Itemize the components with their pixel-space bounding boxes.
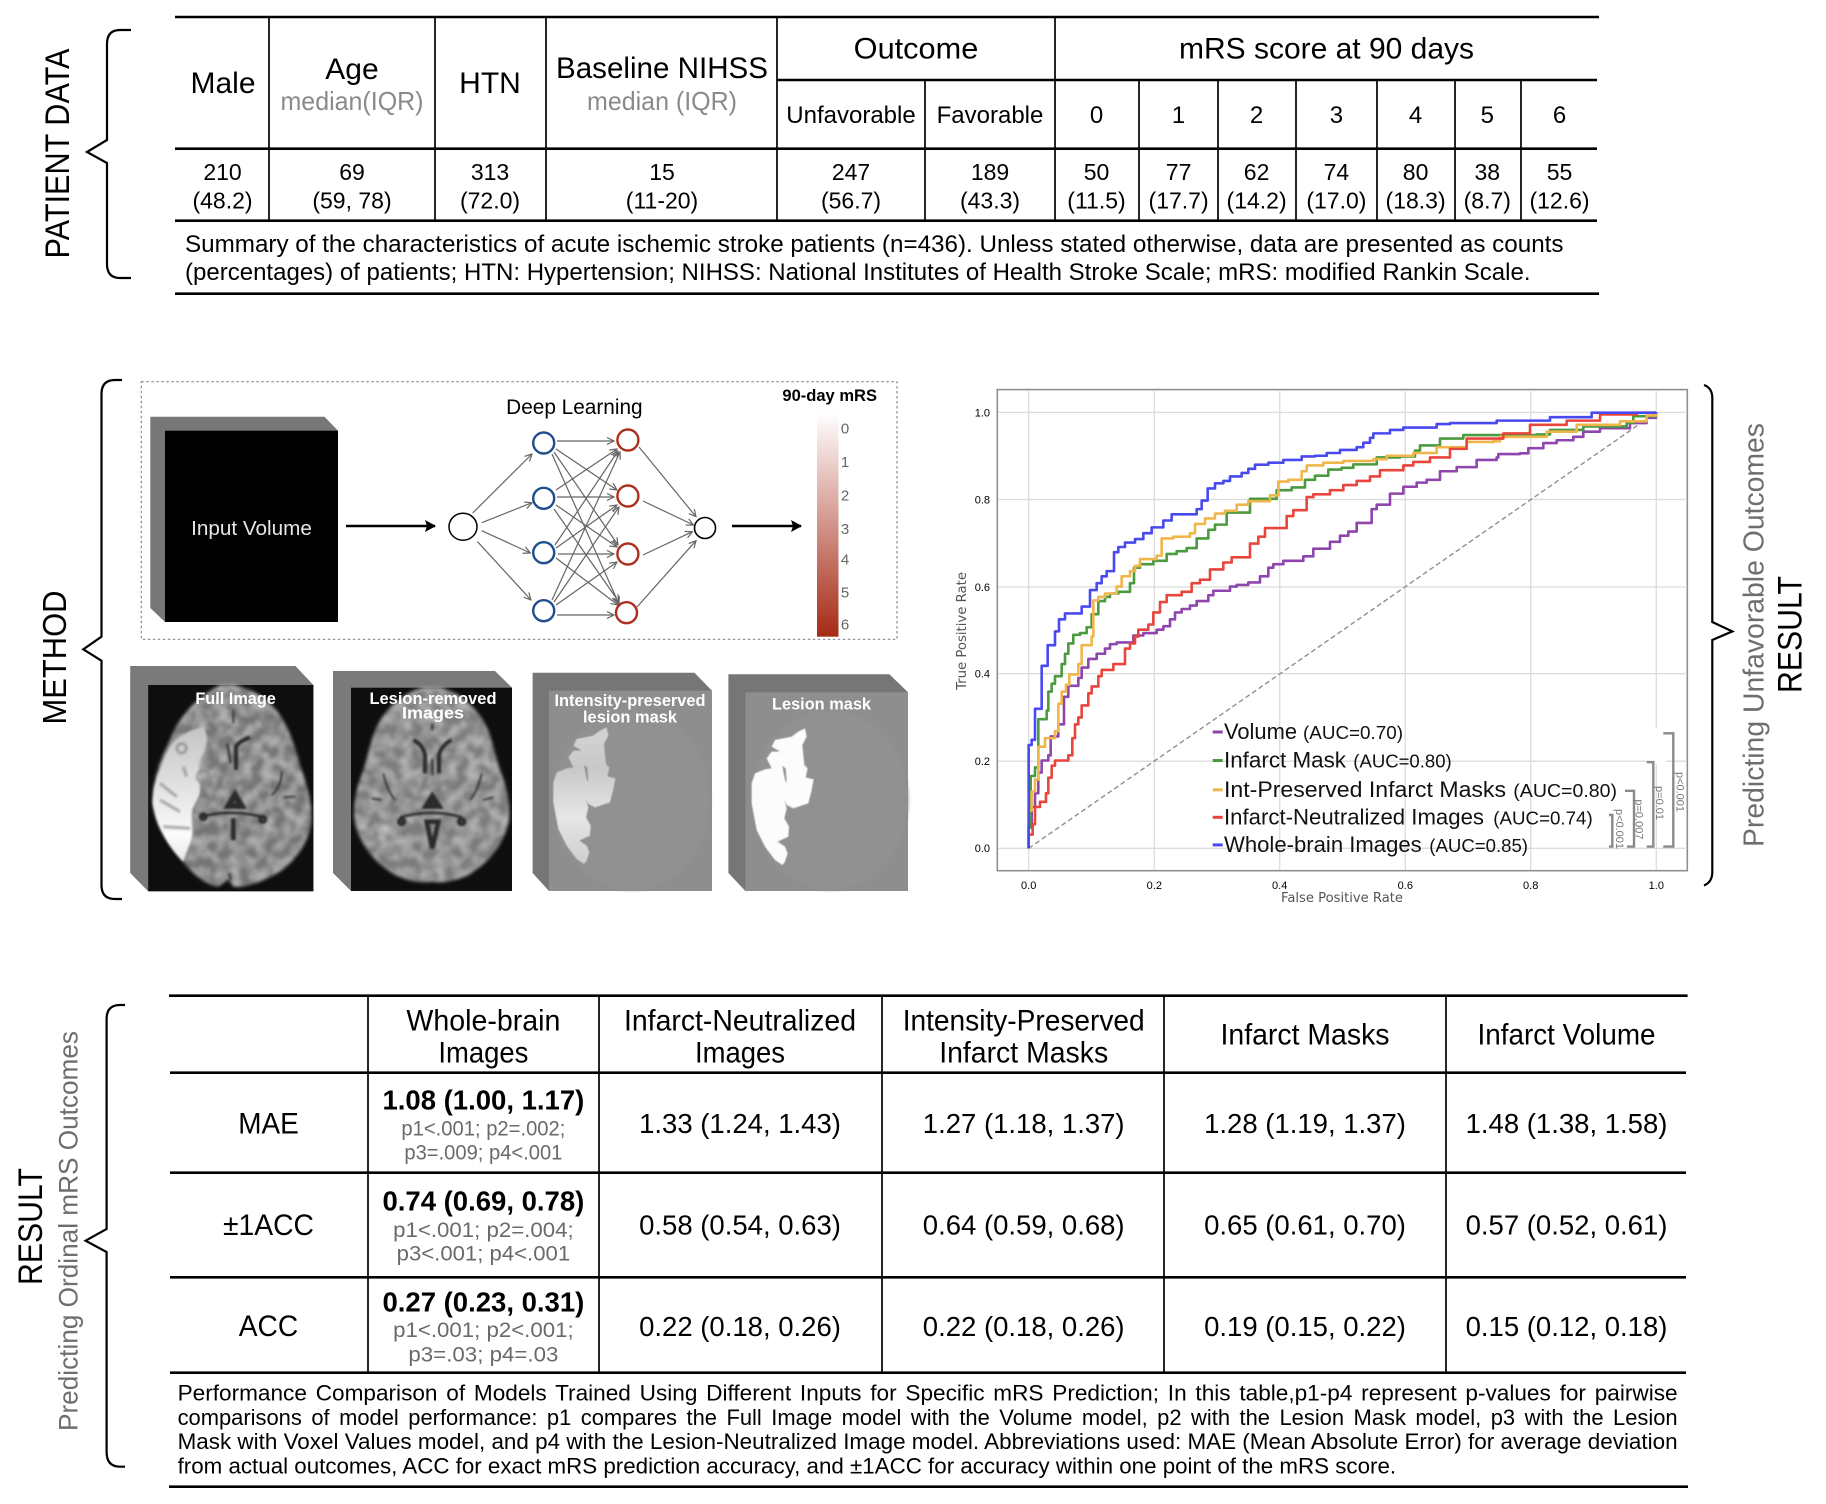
brace: patient data [87, 30, 131, 278]
panel: intensity-preserved lesion mask input: Intensity-preserved [554, 692, 706, 710]
table: patient characteristics: 6 [1553, 102, 1566, 129]
table: model performance: 0.22 (0.18, 0.26) [639, 1311, 841, 1342]
legend: 90-day mRS colour scale: 3 [841, 521, 849, 538]
panel: lesion-removed input [333, 671, 512, 891]
axis tick labels: 0.2 [975, 756, 990, 768]
table: patient characteristics: 4 [1409, 102, 1422, 129]
table: patient characteristics: (8.7) [1464, 188, 1511, 214]
legend: ROC models: (AUC=0.80) [1513, 780, 1617, 801]
legend: ROC models: Int-Preserved Infarct Masks [1224, 777, 1506, 802]
table: patient characteristics: median (IQR) [587, 86, 737, 116]
legend: 90-day mRS colour scale: 90-day mRS [782, 387, 877, 405]
table: model performance: 1.27 (1.18, 1.37) [923, 1108, 1125, 1139]
table: model performance: Images [438, 1036, 528, 1070]
table: patient characteristics: Unfavorable [786, 102, 916, 129]
footnote: performance table: Performance Comparison of Models Trained Using Different Inputs for Specific mRS Prediction; In this table,p1-p4 represent p-values for pairwise [178, 1380, 1678, 1406]
table: model performance: p3<.001; p4<.001 [397, 1242, 570, 1266]
table: model performance: 0.22 (0.18, 0.26) [923, 1311, 1125, 1342]
table: patient characteristics: (11-20) [626, 188, 698, 214]
trace: int-preserved infarct masks [1029, 412, 1656, 848]
axis tick labels: 1.0 [975, 407, 990, 419]
footnote: performance table [178, 1380, 1678, 1478]
significance brackets: p=0.01 [1653, 786, 1665, 820]
ROC traces [1029, 412, 1656, 848]
footnote: patient table [185, 231, 1564, 286]
panel: intensity-preserved lesion mask input: lesion mask [583, 708, 678, 726]
table: model performance: 0.58 (0.54, 0.63) [639, 1210, 841, 1240]
table: model performance: 1.28 (1.19, 1.37) [1204, 1108, 1406, 1139]
trace: infarct-neutralized images [1029, 412, 1656, 848]
table: model performance: p1<.001; p2=.002; [401, 1118, 565, 1140]
table: patient characteristics: 80 [1403, 159, 1428, 185]
table: patient characteristics: (43.3) [960, 188, 1020, 214]
table: patient characteristics: 313 [471, 159, 509, 185]
legend: ROC models [1213, 719, 1617, 857]
axis tick labels: 0.0 [975, 843, 990, 855]
table: model performance: 1.33 (1.24, 1.43) [639, 1108, 841, 1139]
image: binary lesion mask [752, 710, 908, 890]
table: patient characteristics: 247 [832, 159, 870, 185]
legend: ROC models: Whole-brain Images [1224, 832, 1422, 857]
table: model performance: p1<.001; p2<.001; [393, 1319, 574, 1342]
legend: ROC models: (AUC=0.74) [1493, 808, 1593, 828]
panel: lesion-removed input: Lesion-removed [370, 690, 496, 708]
arrow: input to network [346, 525, 435, 527]
subheading: predicting ordinal mRS outcomes: Predicting Ordinal mRS Outcomes [54, 1031, 84, 1431]
trace: infarct mask [1029, 412, 1656, 848]
arrow: network to score [732, 525, 801, 527]
table: patient characteristics: 189 [971, 159, 1009, 185]
panel: lesion mask input [728, 674, 908, 891]
heading: deep learning: Deep Learning [506, 396, 643, 419]
plot frame [997, 390, 1687, 871]
table: model performance: p3=.03; p4=.03 [408, 1344, 558, 1366]
significance brackets: p=0.007 [1632, 799, 1644, 839]
legend: ROC models: Volume [1224, 719, 1297, 744]
legend: ROC models: Infarct-Neutralized Images [1224, 804, 1484, 830]
table: model performance: p1<.001; p2=.004; [393, 1219, 574, 1242]
image: brain scan without lesion [354, 687, 509, 882]
brace: unfavorable outcomes [1704, 385, 1732, 886]
panel: full image input: Full Image [195, 690, 276, 708]
axis tick labels: 0.8 [1523, 880, 1538, 892]
axis tick labels: 0.2 [1147, 880, 1162, 892]
axis title: true positive rate: True Positive Rate [955, 572, 970, 691]
legend: ROC models: Infarct Mask [1224, 748, 1347, 772]
legend: ROC models: (AUC=0.80) [1353, 750, 1452, 772]
table: patient characteristics: 1 [1172, 102, 1185, 129]
diagram: neural network [449, 430, 716, 623]
table: model performance: p3=.009; p4<.001 [404, 1142, 562, 1164]
panel: intensity-preserved lesion mask input [533, 673, 712, 891]
trace: whole-brain images [1029, 412, 1656, 848]
section label: method [36, 380, 122, 899]
chance diagonal [1029, 412, 1656, 848]
table: patient characteristics: 69 [339, 159, 365, 185]
table: patient characteristics: Favorable [937, 102, 1043, 129]
heading: result: RESULT [12, 1168, 50, 1285]
legend: 90-day mRS colour scale: 5 [841, 584, 849, 602]
table: patient characteristics: (59, 78) [312, 188, 392, 214]
subheading: predicting unfavorable outcomes: Predicting Unfavorable Outcomes [1738, 423, 1770, 847]
table: patient characteristics: (14.2) [1227, 188, 1287, 214]
heading: patient data: PATIENT DATA [39, 48, 77, 258]
icon: input volume block [150, 417, 338, 622]
table: patient characteristics: Baseline NIHSS [556, 52, 768, 85]
axis tick labels: 0.6 [975, 582, 990, 594]
table: patient characteristics: 3 [1330, 102, 1343, 129]
axis tick labels: 0.8 [975, 494, 990, 506]
table: patient characteristics: 38 [1475, 159, 1500, 185]
table: model performance: 1.08 (1.00, 1.17) [382, 1084, 584, 1116]
table: patient characteristics: Outcome [854, 32, 978, 66]
table: patient characteristics: (72.0) [460, 188, 520, 214]
table: model performance: 0.57 (0.52, 0.61) [1466, 1210, 1667, 1240]
table: patient characteristics: (48.2) [192, 188, 253, 214]
legend: 90-day mRS colour scale: 1 [841, 454, 849, 471]
table: model performance: ±1ACC [223, 1209, 314, 1242]
table: patient characteristics: 2 [1250, 102, 1263, 129]
footnote: performance table: Mask with Voxel Values model, and p4 with the Lesion-Neutralized Image model. Abbreviations used: MAE (Mean Absolute Error) for average deviation [178, 1429, 1678, 1454]
significance brackets: p<0.001 [1613, 809, 1625, 849]
table: model performance: Infarct Masks [1220, 1018, 1390, 1052]
grid lines [998, 390, 1687, 870]
table: patient characteristics: Male [190, 67, 256, 100]
panel: lesion-removed input: Images [402, 704, 464, 722]
footnote: patient table: Summary of the characteristics of acute ischemic stroke patients (n=436). Unless stated otherwise, data are presented as counts [185, 231, 1564, 258]
table: model performance: MAE [238, 1108, 299, 1140]
table: model performance: 0.64 (0.59, 0.68) [923, 1210, 1125, 1240]
table: patient characteristics: mRS score at 90 days [1179, 32, 1474, 66]
axis tick labels: 0.4 [975, 669, 990, 681]
table: patient characteristics: (17.7) [1149, 188, 1209, 214]
table: patient characteristics: 210 [203, 159, 242, 185]
table: model performance: 1.48 (1.38, 1.58) [1466, 1108, 1667, 1139]
chart: ROC curves [955, 390, 1687, 906]
axis tick labels: 0.6 [1398, 880, 1413, 892]
axis tick labels: 0.0 [1021, 880, 1036, 892]
table: patient characteristics: 77 [1166, 159, 1191, 185]
icon: input volume block: Input Volume [191, 517, 312, 540]
footnote: performance table: comparisons of model performance: p1 compares the Full Image model with the Volume model, p2 with the Lesion Mask model, p3 with the Lesion [178, 1405, 1678, 1430]
axis tick labels [975, 407, 1664, 892]
brace: method [83, 380, 122, 899]
table: patient characteristics [175, 17, 1599, 294]
legend: 90-day mRS colour scale: 2 [841, 488, 849, 504]
axis tick labels: 1.0 [1649, 880, 1664, 892]
table: model performance: Images [695, 1036, 785, 1070]
table: model performance: ACC [239, 1310, 298, 1343]
section label: result, unfavorable outcomes [1704, 385, 1810, 886]
axis tick labels: 0.4 [1272, 880, 1287, 892]
axis title: false positive rate: False Positive Rate [1281, 891, 1403, 906]
legend: 90-day mRS colour scale [782, 387, 877, 637]
legend: ROC models: (AUC=0.70) [1303, 722, 1403, 743]
table: patient characteristics: 74 [1324, 159, 1349, 185]
table: patient characteristics: 5 [1481, 102, 1494, 129]
table: model performance: 0.27 (0.23, 0.31) [382, 1286, 584, 1318]
table: patient characteristics: (17.0) [1306, 188, 1366, 214]
table: patient characteristics: 0 [1090, 102, 1103, 129]
panel: deep learning pipeline [141, 382, 897, 639]
significance brackets: p<0.001 [1674, 772, 1686, 812]
section label: patient data [39, 30, 131, 278]
image: brain scan with lesion [153, 685, 312, 887]
table: model performance: 0.65 (0.61, 0.70) [1204, 1210, 1406, 1240]
table: patient characteristics: (56.7) [821, 188, 881, 214]
section label: result, ordinal outcomes [12, 1005, 125, 1467]
table: patient characteristics: median(IQR) [280, 86, 424, 116]
panel: full image input [130, 666, 313, 891]
significance brackets [1609, 728, 1686, 849]
table: patient characteristics: HTN [459, 67, 521, 100]
legend: 90-day mRS colour scale: 0 [841, 420, 849, 438]
table: model performance: 0.74 (0.69, 0.78) [382, 1186, 584, 1216]
table: patient characteristics: (11.5) [1067, 188, 1126, 214]
table: patient characteristics: 62 [1244, 159, 1269, 185]
legend: 90-day mRS colour scale: 6 [841, 616, 849, 634]
image: intensity-preserved lesion [553, 710, 710, 890]
footnote: performance table: from actual outcomes, ACC for exact mRS prediction accuracy, and ±1ACC for accuracy within one point of the mRS score. [178, 1454, 1396, 1478]
brace: ordinal outcomes [86, 1005, 125, 1467]
panel: lesion mask input: Lesion mask [772, 696, 872, 714]
table: patient characteristics: 15 [649, 159, 675, 185]
legend: 90-day mRS colour scale: 4 [841, 552, 849, 568]
table: model performance: Intensity-Preserved [903, 1004, 1145, 1038]
heading: method: METHOD [36, 590, 73, 724]
table: model performance: Infarct Volume [1478, 1018, 1656, 1052]
table: model performance: 0.19 (0.15, 0.22) [1204, 1311, 1406, 1342]
legend: ROC models: (AUC=0.85) [1429, 835, 1528, 856]
table: patient characteristics: 50 [1084, 159, 1109, 185]
footnote: patient table: (percentages) of patients; HTN: Hypertension; NIHSS: National Institutes of Health Stroke Scale; mRS: modified Rankin Scale. [185, 259, 1530, 286]
table: model performance: 0.15 (0.12, 0.18) [1466, 1311, 1667, 1342]
trace: volume [1029, 412, 1656, 848]
table: patient characteristics: 55 [1547, 159, 1572, 185]
table: patient characteristics: (18.3) [1386, 188, 1446, 214]
table: model performance: Infarct-Neutralized [624, 1004, 856, 1038]
table: patient characteristics: Age [325, 53, 379, 86]
table: model performance: Infarct Masks [939, 1036, 1108, 1070]
table: patient characteristics: (12.6) [1529, 188, 1590, 214]
heading: result: RESULT [1772, 576, 1810, 693]
table: model performance [169, 996, 1688, 1487]
table: model performance: Whole-brain [406, 1004, 560, 1038]
